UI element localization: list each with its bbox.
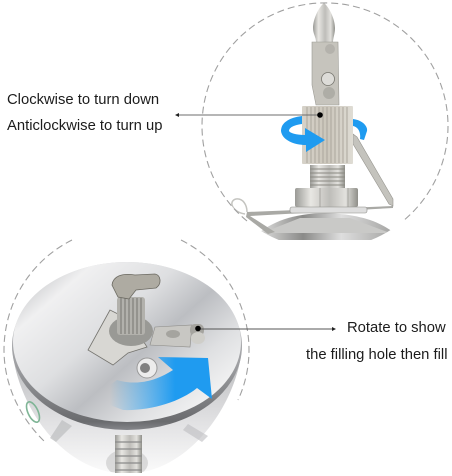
panel: bottom detail circle (4, 240, 249, 476)
hex nut (295, 188, 358, 207)
threaded screw (115, 435, 142, 473)
blue fading rotation arrow (110, 357, 212, 410)
panel: top detail circle (202, 3, 448, 240)
text: filling instructions: Rotate to show (347, 320, 446, 336)
right lever plate (150, 325, 192, 347)
wing lever (88, 310, 147, 365)
dome and lever base (232, 199, 402, 240)
arrow: pointer line to adjuster block (175, 112, 323, 118)
washer (290, 207, 367, 213)
green label on side (24, 400, 42, 424)
dashed circle outline (202, 3, 448, 221)
text: turn direction instructions (7, 92, 162, 134)
text: turn direction instructions: Anticlockwise to turn up (7, 118, 162, 134)
threaded shaft (310, 165, 345, 188)
top swivel knob (112, 274, 160, 299)
spring arm (353, 134, 393, 206)
filling hole (137, 358, 157, 378)
text: filling instructions (306, 320, 447, 363)
text: turn direction instructions: Clockwise to turn down (7, 92, 159, 108)
adjuster tip (313, 3, 335, 42)
dashed circle outline (4, 240, 249, 442)
disc top surface (13, 262, 241, 422)
back of blue rotation arrow (353, 119, 367, 140)
base collar (109, 316, 153, 346)
disc side wall (13, 358, 240, 472)
lever post (190, 324, 205, 344)
text: filling instructions: the filling hole then fill (306, 347, 447, 363)
knurled adjuster block (302, 106, 353, 164)
front of blue rotation arrow (281, 116, 325, 152)
knurled knob stem (117, 297, 145, 335)
arrow: pointer line to lever post (195, 326, 336, 331)
disc rim (12, 262, 242, 430)
adjuster plate (312, 42, 339, 105)
